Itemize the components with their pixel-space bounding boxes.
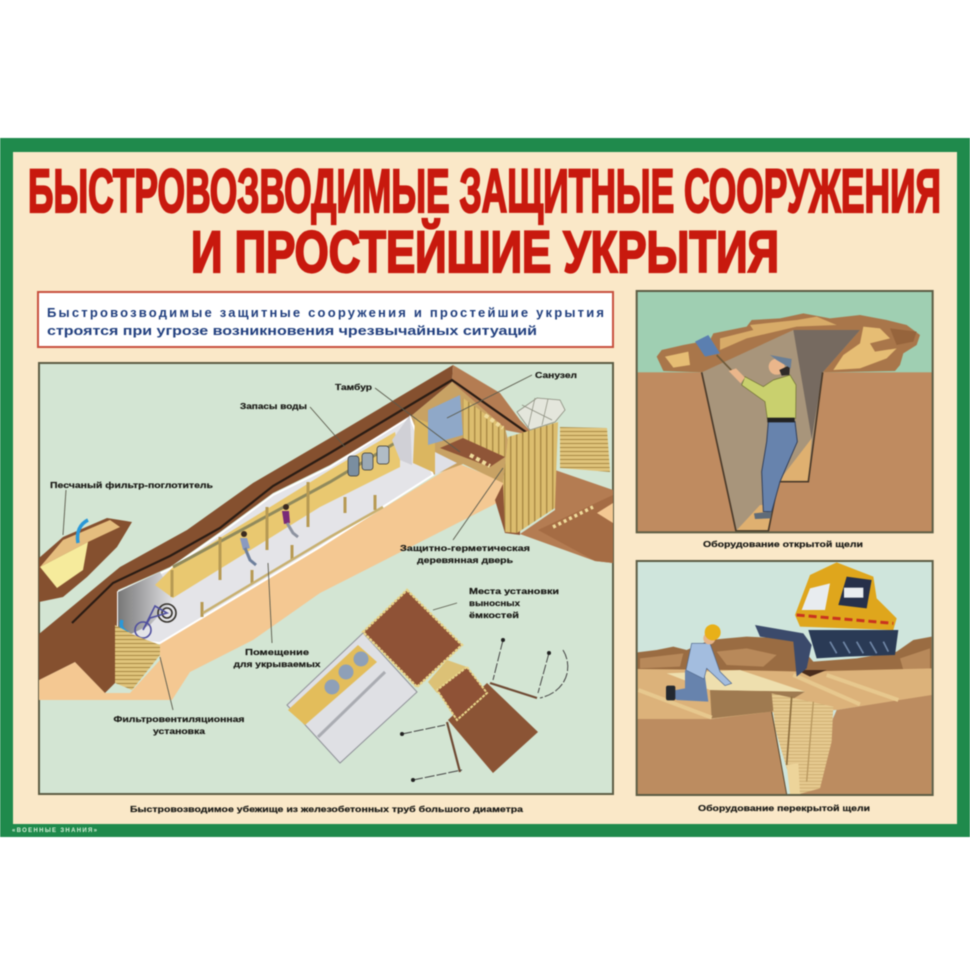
- label: water reserves: Запасы воды: [240, 401, 307, 411]
- shelter tunnel interior: [118, 417, 433, 643]
- ground: [637, 372, 933, 532]
- label: filter-ventilation unit: Фильтровентиляционная: [114, 714, 245, 724]
- kneeling man: [666, 624, 732, 702]
- label: door: Защитно-герметическая: [400, 543, 530, 553]
- panel: open trench: [637, 291, 933, 532]
- panel: covered trench: [637, 561, 933, 795]
- caption: shelter: Быстровозводимое убежище из железобетонных труб большого диаметра: [130, 804, 523, 814]
- log box at entry: [115, 625, 160, 690]
- bulldozer: [755, 562, 898, 677]
- ground: [637, 695, 932, 794]
- label: tank locations: ёмкостей: [469, 610, 519, 620]
- title: [28, 157, 941, 285]
- label: door: [400, 543, 530, 565]
- plan view of pipe shelter: [287, 590, 568, 782]
- label: sanitary room: Санузел: [535, 370, 577, 380]
- bicycle in filter-ventilation unit: [121, 604, 176, 638]
- title: И ПРОСТЕЙШИЕ УКРЫТИЯ: [191, 220, 779, 285]
- label: room for sheltered: для укрываемых: [234, 659, 321, 669]
- wooden trench lining: [772, 693, 833, 794]
- soil mound: [637, 637, 932, 678]
- publisher mark: «ВОЕННЫЕ ЗНАНИЯ»: [12, 828, 98, 834]
- sand surface: [637, 668, 932, 719]
- label: vestibule: Тамбур: [335, 382, 372, 392]
- label: tank locations: выносных: [469, 598, 520, 608]
- shelter earth and ground: [39, 365, 535, 700]
- label: filter-ventilation unit: установка: [153, 726, 205, 736]
- sand filter-absorber: [39, 518, 132, 602]
- poster frame: [0, 138, 970, 837]
- spoil mound: [657, 313, 920, 372]
- trench: [702, 330, 860, 531]
- label: tank locations: [469, 586, 559, 620]
- callout: intro text: [38, 292, 613, 347]
- panel: rapidly built shelter: [39, 363, 613, 794]
- label: room for sheltered: Помещение: [245, 647, 309, 657]
- caption: open trench: Оборудование открытой щели: [703, 539, 863, 549]
- label: tank locations: Места установки: [469, 586, 559, 596]
- water barrels: [348, 446, 389, 476]
- callout: intro text: Быстровозводимые защитные сооружения и простейшие укрытия: [47, 305, 604, 320]
- label: room for sheltered: [234, 647, 321, 669]
- label: sand filter: Песчаный фильтр-поглотитель: [50, 480, 213, 490]
- callout: intro text: строятся при угрозе возникновения чрезвычайных ситуаций: [47, 323, 537, 338]
- label: door: деревянная дверь: [417, 555, 513, 565]
- leader lines: [63, 375, 532, 710]
- boards over trench: [638, 670, 898, 718]
- digging man: [695, 335, 797, 519]
- people on benches: [240, 504, 298, 565]
- caption: covered trench: Оборудование перекрытой щели: [698, 803, 870, 813]
- vestibule and sanitary room: [392, 395, 613, 563]
- label: filter-ventilation unit: [114, 714, 245, 736]
